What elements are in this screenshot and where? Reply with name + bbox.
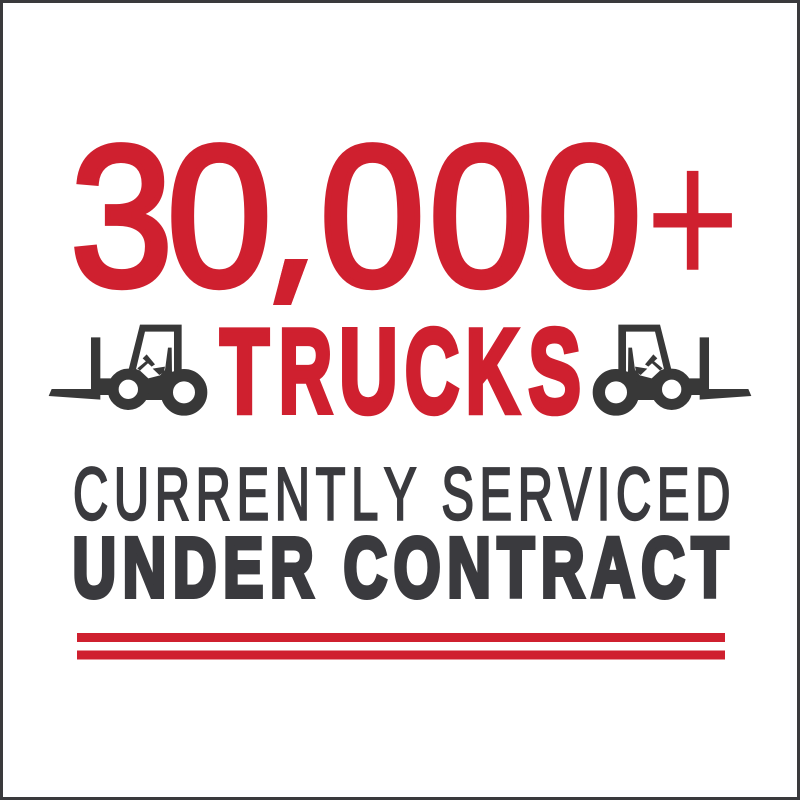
trucks label: R bbox=[279, 306, 332, 439]
headline number: , bbox=[254, 48, 326, 338]
icon: left forklift bbox=[49, 325, 201, 409]
headline number: 0 bbox=[429, 105, 534, 328]
trucks label: K bbox=[466, 306, 519, 439]
trucks label: S bbox=[528, 304, 581, 438]
trucks label: C bbox=[405, 305, 459, 439]
trucks label bbox=[220, 304, 581, 439]
headline number: + bbox=[646, 104, 740, 331]
text: under contract: UNDER CONTRACT bbox=[72, 521, 728, 615]
icon: right forklift bbox=[599, 325, 751, 409]
headline number: 3 bbox=[70, 104, 173, 328]
headline number: 0 bbox=[537, 105, 642, 328]
trucks label: T bbox=[220, 304, 269, 438]
headline number: 0 bbox=[320, 105, 425, 328]
text: currently serviced: CURRENTLY SERVICED bbox=[73, 453, 730, 536]
headline number: 0 bbox=[167, 105, 272, 328]
double red rule bbox=[77, 633, 725, 660]
trucks label: U bbox=[339, 304, 398, 438]
headline number bbox=[74, 142, 732, 305]
